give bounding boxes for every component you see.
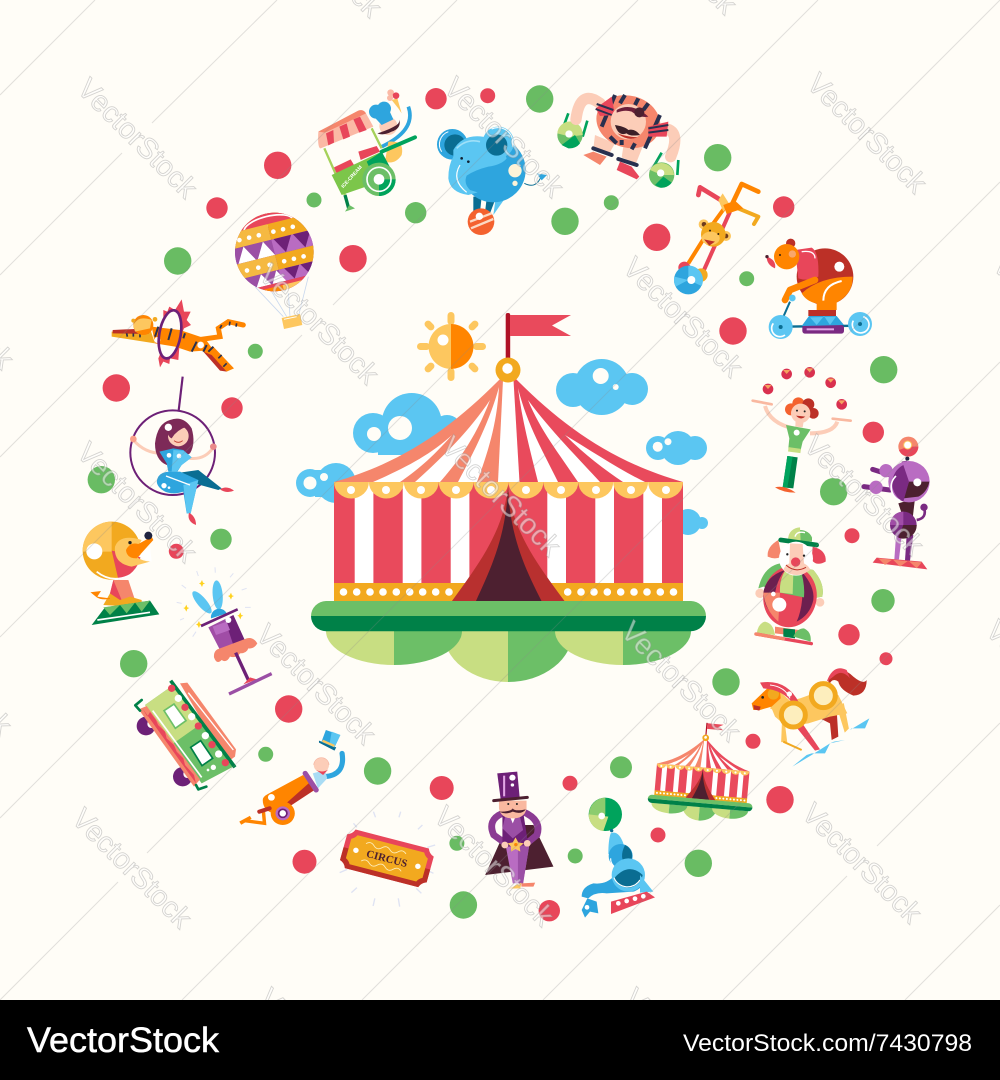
circus wagon xyxy=(135,681,236,789)
watermark text: VectorStock xyxy=(800,68,933,200)
watermark text: VectorStock xyxy=(614,616,747,748)
cart: ICE-CREAM xyxy=(340,165,364,190)
ice floe xyxy=(792,718,869,767)
elephant ears xyxy=(437,129,468,160)
watermark text: VectorStock xyxy=(797,430,930,562)
flag xyxy=(506,313,571,361)
watermark text: VectorStock xyxy=(65,803,198,935)
elephant body xyxy=(461,138,526,202)
bear on scooter xyxy=(765,239,872,339)
tent roof xyxy=(334,376,683,482)
hot air balloon xyxy=(235,212,314,329)
footer brand: VectorStock xyxy=(27,1021,220,1060)
circus ticket: CIRCUS xyxy=(365,848,409,870)
polka dots ring xyxy=(88,85,897,921)
watermark text: VectorStock xyxy=(249,619,382,751)
aerialist in hoop xyxy=(130,377,234,525)
watermark text: VectorStock xyxy=(434,431,567,563)
juggling balls xyxy=(763,367,847,410)
circus ticket xyxy=(338,812,436,907)
scalloped valance xyxy=(334,482,683,499)
kettlebells xyxy=(557,113,678,188)
juggler xyxy=(753,367,851,493)
small circus tent icon xyxy=(646,718,759,825)
roof knob xyxy=(496,358,520,382)
footer bar xyxy=(0,1000,1000,1080)
watermark text: VectorStock xyxy=(427,801,560,933)
rabbit in magic hat xyxy=(177,567,272,694)
elephant tail xyxy=(524,173,547,185)
cannon with human cannonball xyxy=(240,730,343,825)
awning xyxy=(318,110,373,148)
lion icon xyxy=(83,522,159,625)
vendor xyxy=(369,89,410,162)
watermark text: VectorStock xyxy=(252,259,385,391)
footer url: VectorStock.com/7430798 xyxy=(683,1030,972,1057)
unicycle wheel xyxy=(674,262,708,294)
watermark text: VectorStock xyxy=(71,73,203,205)
ice cream cart xyxy=(318,89,415,212)
monkey on unicycle xyxy=(674,184,758,294)
tiger jumping through hoop xyxy=(112,299,243,372)
watermark text: VectorStock xyxy=(795,798,928,930)
poodle with ball xyxy=(864,437,930,569)
carousel horse xyxy=(752,668,869,767)
watermark text: VectorStock xyxy=(437,72,570,204)
main circus tent xyxy=(311,313,706,682)
grass mound xyxy=(311,601,706,682)
tent door xyxy=(452,484,564,601)
elephant on ball xyxy=(437,127,547,235)
seal balancing a ball xyxy=(582,798,655,918)
strongman xyxy=(557,88,678,188)
clouds behind the tent xyxy=(296,359,708,535)
elephant head and trunk xyxy=(448,136,507,195)
tent wall xyxy=(334,482,683,602)
watermark text: VectorStock xyxy=(70,437,203,569)
watermark text: VectorStock xyxy=(616,252,749,384)
sun xyxy=(417,312,486,381)
scooter xyxy=(769,302,872,339)
stripes and triangles xyxy=(235,224,272,249)
ringmaster xyxy=(485,772,553,889)
clown xyxy=(755,527,826,644)
ball xyxy=(468,208,494,235)
